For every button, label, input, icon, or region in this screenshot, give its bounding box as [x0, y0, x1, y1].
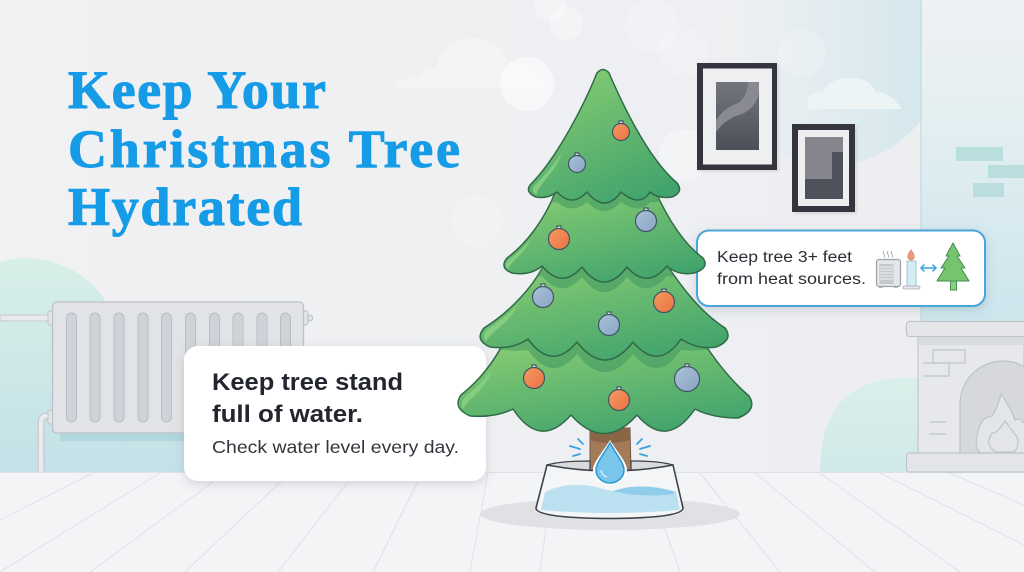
tier 4 left highlight — [462, 370, 492, 409]
radiator — [0, 302, 313, 472]
tier 3 left highlight — [484, 304, 518, 342]
ornament orange — [654, 289, 674, 312]
tier 2 left highlight — [506, 240, 530, 270]
tree trunk — [590, 428, 631, 472]
tier 1 shadow — [551, 193, 660, 211]
fireplace — [906, 322, 1024, 472]
callout: water — [184, 346, 486, 481]
floor with plank lines — [0, 472, 1024, 572]
ornaments — [524, 121, 700, 410]
title: Hydrated — [68, 177, 302, 237]
title — [68, 60, 460, 237]
ornament orange — [608, 387, 630, 410]
tree tier 1 — [528, 70, 680, 203]
title: Christmas Tree — [68, 119, 460, 179]
ornament blue — [598, 312, 620, 336]
picture frame: small — [792, 124, 857, 214]
picture frame: large — [697, 63, 779, 172]
floor shadow under tree stand — [480, 498, 740, 530]
tier 1 left highlight — [533, 152, 562, 195]
callout: water: Check water level every day. — [212, 437, 459, 457]
ornament orange — [524, 365, 544, 388]
callout: water: Keep tree stand — [212, 369, 403, 396]
callout: heat sources: Keep tree 3+ feet — [717, 249, 853, 266]
callout: water: full of water. — [212, 401, 363, 428]
tree tier 4 — [458, 340, 752, 434]
tier 2 shadow — [537, 267, 674, 292]
ornament blue — [636, 208, 656, 232]
water stand: bowl — [536, 461, 683, 518]
tree: foliage tiers — [458, 70, 752, 434]
right wall section with bricks — [921, 0, 1024, 330]
callout: heat sources: from heat sources. — [717, 271, 866, 288]
ornament orange — [612, 121, 630, 140]
ornament blue — [568, 153, 586, 172]
tree tier 2 — [504, 190, 705, 282]
icon: heater — [876, 251, 900, 287]
ornament blue — [674, 364, 700, 392]
icon: candle — [903, 250, 920, 289]
ornament blue — [532, 284, 554, 308]
background decoration: teal blobs, clouds and bokeh — [0, 0, 945, 472]
icon: small tree — [937, 243, 969, 290]
callout: heat sources — [697, 230, 985, 306]
title: Keep Your — [68, 60, 326, 120]
tier 3 shadow — [500, 340, 708, 372]
ornament orange — [548, 226, 570, 250]
tree tier 3 — [480, 262, 728, 360]
water drop icon with rays — [570, 439, 650, 485]
icon: double arrow — [921, 264, 936, 272]
